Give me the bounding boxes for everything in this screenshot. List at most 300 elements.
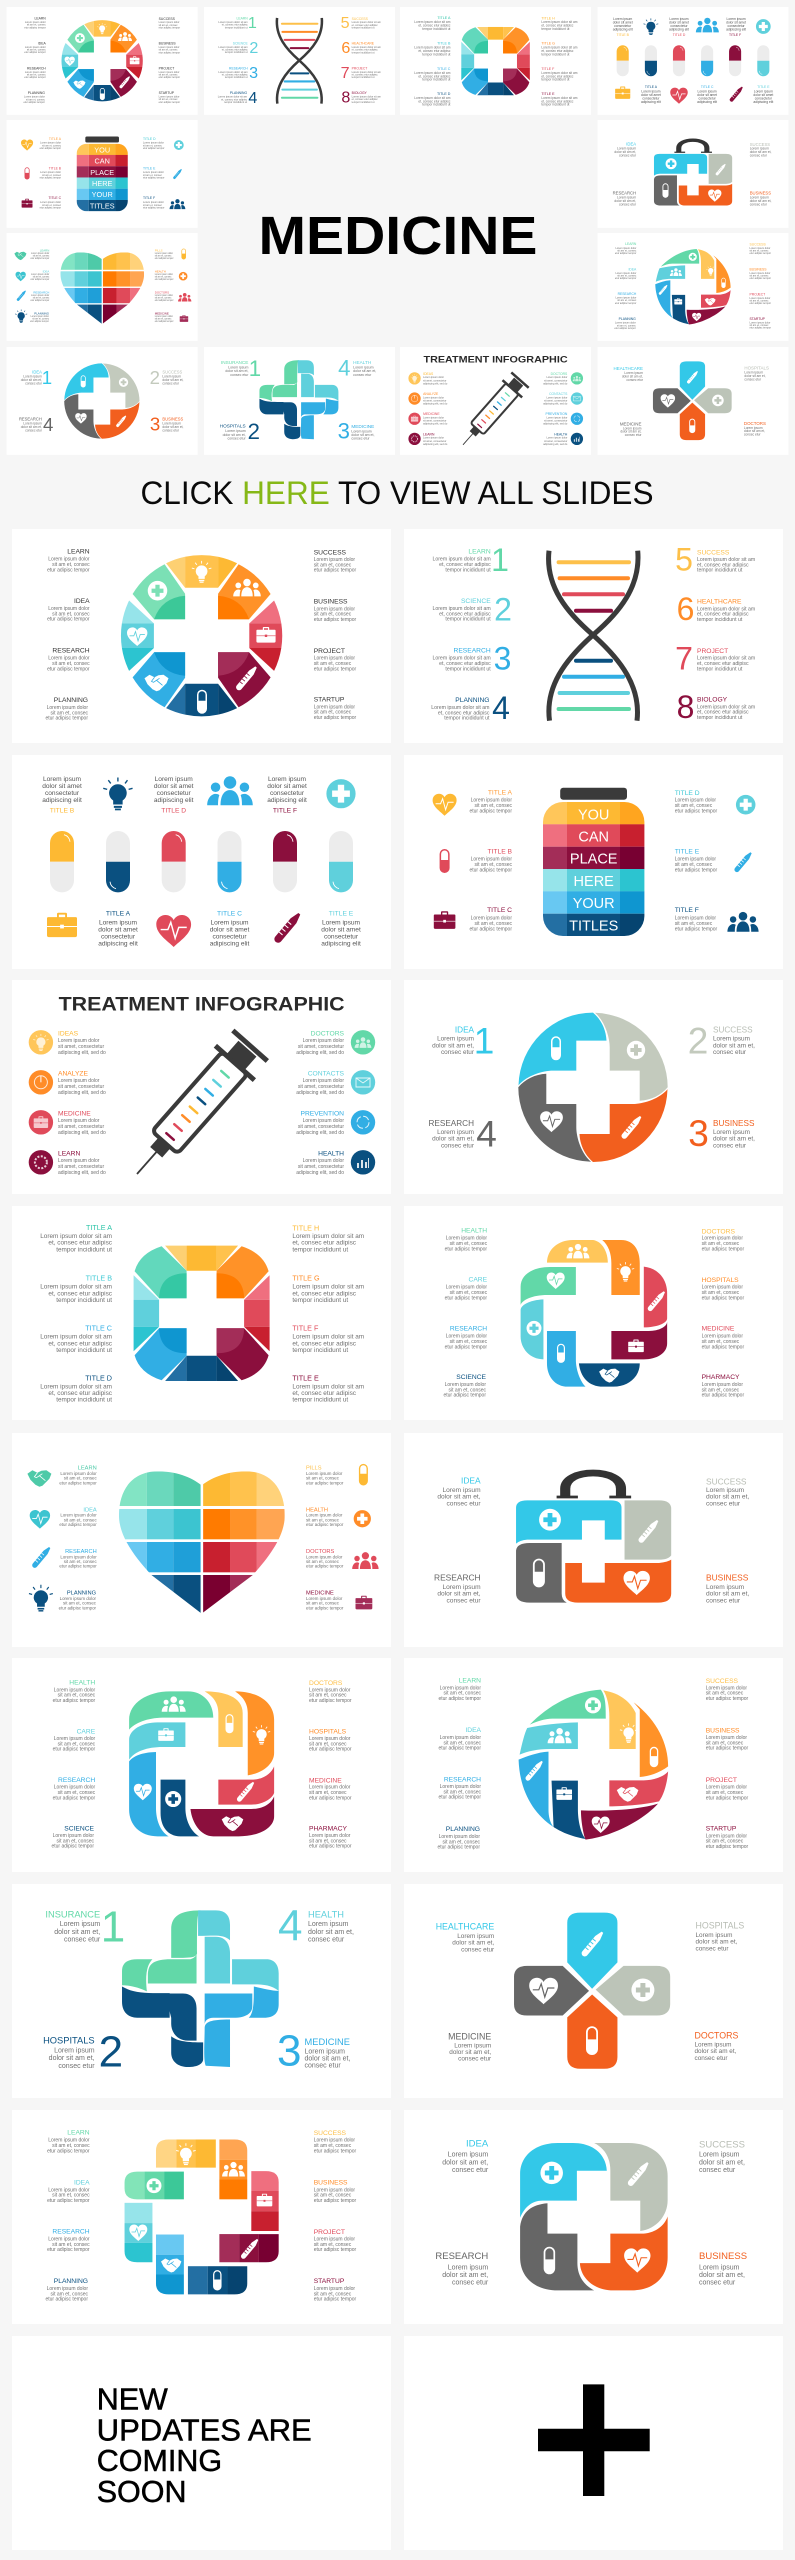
text: HOSPITALS: HOSPITALS [702, 1277, 739, 1284]
text: CONTACTS: adipiscing elit, sed do [296, 1090, 344, 1096]
text: PLANNING: PLANNING [54, 697, 88, 704]
text: LEARN [59, 1466, 97, 1485]
text: IDEA: IDEA [74, 598, 90, 605]
text: SCIENCE: Lorem ipsum dolor [445, 1382, 486, 1388]
text: TITLE D: TITLE D [161, 808, 186, 815]
text: MEDICINE: etur adipisc tempor [702, 1344, 744, 1350]
text: MEDICINE: MEDICINE [306, 1591, 334, 1597]
text: new updates are coming soon: SOON [97, 2475, 187, 2509]
text: TITLE G: TITLE G [292, 1274, 320, 1283]
text: BUSINESS: BUSINESS [706, 1727, 740, 1734]
icon: people [233, 579, 261, 596]
text: RESEARCH: sit am et, consec [52, 661, 90, 667]
text: RESEARCH [434, 1573, 481, 1604]
text: TITLE E: etur adipisc tempor [675, 867, 718, 873]
text: PHARMACY: sit am et, consec [702, 1387, 740, 1393]
text: BUSINESS: etur adipisc tempor [314, 2198, 357, 2204]
icon: heart [156, 915, 191, 947]
text: new updates are coming soon: NEW [97, 2382, 168, 2416]
text: DOCTORS: Lorem ipsum dolor [702, 1236, 743, 1242]
text: TITLE E: sit am et, consec [675, 862, 713, 868]
text: DOCTORS: sit am et, consec [306, 1559, 340, 1564]
text: BUSINESS: dolor sit am et, [713, 1136, 755, 1143]
text: TITLE B: TITLE B [86, 1274, 112, 1283]
text: IDEA [438, 1727, 482, 1752]
text: LEARN: Lorem ipsum dolor [60, 1471, 97, 1476]
icon: heart [30, 1510, 50, 1529]
text: INSURANCE: 1 [101, 1903, 125, 1952]
text: LEARN: Lorem ipsum dolor [48, 557, 90, 563]
text: TITLE F [675, 907, 718, 933]
jar words: HERE [574, 874, 614, 890]
text: TITLE A: TITLE A [106, 911, 131, 918]
text: MEDICINE [58, 1110, 106, 1136]
text: RESEARCH: etur adipisc tempor [438, 1795, 481, 1801]
text: BUSINESS: BUSINESS [713, 1119, 755, 1128]
text: SCIENCE: etur adipisc tempor [443, 1393, 486, 1399]
icon: thermometer [236, 1781, 255, 1803]
text: RESEARCH: RESEARCH [434, 1573, 481, 1583]
text: HEALTHCARE: dolor sit am et, [452, 1940, 494, 1947]
chart: circle ribbons [519, 1690, 668, 1840]
icon: plus [627, 1041, 645, 1059]
text: TITLE F: tempor incididunt ut [292, 1347, 348, 1354]
text: PROJECT: etur adipisc tempor [706, 1795, 749, 1801]
text: TITLE A: dolor sit amet [98, 926, 138, 933]
icon: plus [165, 1791, 181, 1807]
text: HEALTH: sit am et, consec [450, 1241, 488, 1247]
text: TITLE E: et, consec etur adipisc [292, 1390, 357, 1397]
text: PLANNING: PLANNING [67, 1591, 96, 1597]
text: BUSINESS: consec etur [713, 1142, 747, 1149]
text: TITLE C: Lorem ipsum dolor sit am [40, 1334, 112, 1341]
text: TITLE B: etur adipisc tempor [469, 867, 512, 873]
icon: pill [533, 1559, 545, 1587]
icon: people [352, 1552, 379, 1569]
icon: people [567, 1244, 589, 1258]
text: TITLE F: Lorem ipsum [268, 776, 306, 783]
text: TITLE D [675, 790, 718, 815]
text: PROJECT: Lorem ipsum dolor [314, 2237, 355, 2243]
panel: clover cross [404, 1884, 783, 2098]
text: TITLE B: TITLE B [50, 808, 75, 815]
text: HEALTH: HEALTH [69, 1680, 95, 1687]
text: RESEARCH: sit am et, consec [52, 2242, 90, 2248]
step 8: BIOLOGY: Lorem ipsum dolor sit am [697, 704, 755, 710]
text: TITLE E: TITLE E [675, 849, 700, 856]
text: SUCCESS: SUCCESS [706, 1678, 739, 1685]
text: RESEARCH: RESEARCH [52, 2229, 90, 2236]
jar words [569, 807, 618, 934]
text: STARTUP: sit am et, consec [314, 710, 352, 716]
text: DOCTORS: Lorem ipsum [694, 2041, 731, 2048]
text: HOSPITALS: sit am et, consec [702, 1290, 740, 1296]
text: IDEA [432, 1020, 494, 1061]
text: HEALTH [296, 1150, 344, 1176]
text: IDEA: Lorem ipsum dolor [440, 1735, 481, 1741]
text: BUSINESS: sit am et, consec [706, 1740, 744, 1746]
icon: plus [354, 1510, 371, 1527]
text: RESEARCH: RESEARCH [65, 1549, 97, 1555]
text: IDEA [59, 1507, 97, 1527]
text: TITLE D: tempor incididunt ut [56, 1397, 112, 1404]
text: STARTUP: Lorem ipsum dolor [706, 1833, 747, 1839]
panel: eight rounded ribbons [404, 1206, 783, 1420]
text: PROJECT: sit am et, consec [314, 661, 352, 667]
text: MEDICINE [309, 1777, 352, 1801]
panel: circle of eight segments [12, 529, 391, 743]
text: HOSPITALS: 2 [99, 2028, 123, 2077]
icon: briefcase [158, 1728, 174, 1741]
step 6: HEALTHCARE: Lorem ipsum dolor sit am [697, 606, 755, 612]
step 8: BIOLOGY: et, consec etur adipisc [697, 710, 749, 716]
icon: briefcase [556, 1787, 572, 1800]
text: TITLE D: TITLE D [675, 790, 700, 797]
step 7: PROJECT: PROJECT [697, 648, 728, 655]
step 1: LEARN: LEARN [468, 549, 491, 556]
text: SUCCESS [314, 549, 357, 574]
text: DOCTORS: DOCTORS [311, 1030, 345, 1037]
text: HOSPITALS: HOSPITALS [309, 1729, 347, 1736]
icon: analyze circle [29, 1070, 53, 1094]
panel: eight piece circle [404, 1658, 783, 1872]
text: TITLE A: et, consec etur adipisc [48, 1240, 113, 1247]
text: BUSINESS [314, 2179, 357, 2204]
icon: plus [527, 1321, 541, 1336]
text: SUCCESS: Lorem ipsum [699, 2152, 739, 2159]
text: CONTACTS [296, 1070, 345, 1096]
text: SCIENCE [443, 1374, 487, 1399]
icon: thermometer [235, 665, 258, 691]
text: TITLE A: tempor incididunt ut [56, 1246, 112, 1253]
thumbnail: circle slide [7, 7, 198, 115]
panel: treatment infographic [12, 980, 391, 1194]
text: HEALTH: HEALTH [318, 1150, 344, 1157]
icon: thermometer [524, 1760, 544, 1782]
thumbnail: octagon slide [400, 7, 591, 115]
text: PLANNING: sit am et, consec [50, 710, 88, 716]
text: TITLE E: consectetur [324, 933, 359, 940]
text: LEARN: sit amet, consectetur [58, 1164, 104, 1170]
text: TITLE E: Lorem ipsum dolor sit am [292, 1383, 364, 1390]
text: TITLE E: TITLE E [292, 1373, 319, 1382]
thumbnail: DNA slide [204, 7, 395, 115]
text: PHARMACY: sit am et, consec [309, 1838, 347, 1844]
text: SUCCESS: dolor sit am et, [706, 1494, 749, 1501]
chart: ribbons [521, 1240, 667, 1387]
icon: plus [585, 1697, 601, 1713]
text: HEALTH [278, 1901, 354, 1950]
text: MEDICINE: adipiscing elit, sed do [58, 1130, 106, 1136]
text: IDEA: IDEA [465, 1727, 482, 1734]
thumbnail: clover cross slide [598, 347, 789, 455]
text: DOCTORS [296, 1030, 345, 1056]
step 2: SCIENCE: SCIENCE [461, 598, 491, 605]
icon: briefcase [256, 627, 276, 643]
text: MEDICINE [306, 1591, 344, 1610]
text: LEARN [47, 2130, 90, 2154]
step 3: RESEARCH: et, consec etur adipisc [439, 661, 491, 667]
text: TITLE D: Lorem ipsum dolor sit am [40, 1383, 112, 1390]
text: PREVENTION: Lorem ipsum dolor [303, 1118, 344, 1124]
panel: medical bag [404, 1433, 783, 1647]
text: TITLE D: etur adipisc tempor [675, 809, 718, 815]
text: RESEARCH: RESEARCH [428, 1119, 474, 1128]
icon: thermometer [647, 1290, 666, 1312]
text: HEALTH: Lorem ipsum dolor [306, 1513, 342, 1518]
text: CARE [445, 1277, 488, 1301]
text: SUCCESS [706, 1678, 749, 1702]
panel: medicine jar [404, 755, 783, 969]
icon: plus [147, 2178, 161, 2193]
text: CONTACTS: sit amet, consectetur [298, 1084, 344, 1090]
text: RESEARCH: sit am et, consec [443, 1789, 481, 1795]
text: TITLE A: adipiscing elit [98, 940, 138, 947]
text: PILLS: etur adipisc tempor [306, 1480, 344, 1485]
text: SUCCESS: etur adipisc tempor [314, 2148, 357, 2154]
text: TITLE A: sit am et, consec [474, 803, 512, 809]
text: TITLE B: dolor sit amet [42, 783, 82, 790]
step 2: SCIENCE: 2 [494, 591, 512, 627]
text: BUSINESS [706, 1727, 749, 1752]
text: HOSPITALS: sit am et, consec [309, 1741, 347, 1747]
text: SCIENCE: SCIENCE [64, 1825, 95, 1832]
heading: click here to view all slides: CLICK HERE TO VIEW ALL SLIDES [140, 475, 654, 511]
panel: blocks [12, 2110, 391, 2324]
text: TITLE C: Lorem ipsum [210, 919, 249, 926]
text: TITLE D: adipiscing elit [154, 797, 194, 804]
text: HEALTHCARE: HEALTHCARE [436, 1921, 494, 1931]
text: RESEARCH: Lorem ipsum [448, 2264, 488, 2271]
text: STARTUP: STARTUP [314, 2278, 345, 2285]
text: MEDICINE: MEDICINE [58, 1110, 91, 1117]
text: MEDICINE [448, 2031, 492, 2063]
text: RESEARCH: Lorem ipsum [442, 1584, 481, 1591]
text: TITLE E: adipiscing elit [321, 940, 361, 947]
text: TITLE A [98, 911, 138, 947]
icon: handshake [617, 1787, 638, 1802]
step 5: SUCCESS [675, 542, 755, 578]
icon: plus [539, 1509, 561, 1531]
text: SUCCESS: Lorem ipsum [706, 1487, 744, 1494]
text: STARTUP: Lorem ipsum dolor [314, 704, 355, 710]
step 1: LEARN [432, 542, 509, 578]
icon: bulb [176, 2143, 196, 2165]
text: SUCCESS [699, 2139, 745, 2174]
step 7: PROJECT [675, 641, 755, 677]
text: LEARN: Lorem ipsum dolor [440, 1685, 481, 1691]
text: IDEA [442, 2138, 489, 2174]
text: SUCCESS [706, 1476, 749, 1507]
text: RESEARCH: RESEARCH [435, 2251, 488, 2262]
text: SUCCESS: dolor sit am et, [699, 2159, 745, 2166]
text: IDEA: sit am et, consec [52, 611, 90, 617]
chart: four petals [514, 1913, 670, 2069]
text: BUSINESS: Lorem ipsum dolor [314, 2187, 355, 2193]
text: TITLE C [210, 911, 249, 947]
text: LEARN: sit am et, consec [443, 1691, 481, 1697]
text: DOCTORS: sit am et, consec [702, 1241, 740, 1247]
text: CARE: etur adipisc tempor [445, 1295, 487, 1301]
text: ANALYZE: sit amet, consectetur [58, 1084, 104, 1090]
text: RESEARCH: RESEARCH [58, 1777, 95, 1784]
text: PROJECT: PROJECT [314, 2229, 345, 2236]
step 5: SUCCESS: et, consec etur adipisc [697, 562, 749, 568]
icon: thermometer [637, 1519, 660, 1544]
step 4: PLANNING: Lorem ipsum dolor sit am [431, 705, 490, 711]
text: RESEARCH: Lorem ipsum dolor [446, 1334, 487, 1340]
text: PROJECT [706, 1777, 749, 1801]
icon: heart [529, 1978, 558, 2004]
step 7: PROJECT: 7 [675, 641, 693, 677]
text: IDEA: etur adipisc tempor [47, 2198, 90, 2204]
text: DOCTORS: dolor sit am et, [694, 2048, 737, 2055]
text: SUCCESS: Lorem ipsum [713, 1036, 750, 1043]
step 6: HEALTHCARE [677, 591, 755, 627]
icon: doctors circle [351, 1030, 375, 1054]
text: CARE: CARE [469, 1277, 488, 1284]
icon: briefcase [434, 911, 455, 929]
text: RESEARCH: RESEARCH [52, 648, 90, 655]
text: TITLE B: Lorem ipsum [43, 776, 81, 783]
text: RESEARCH [435, 2251, 489, 2286]
text: STARTUP: sit am et, consec [706, 1839, 744, 1845]
text: HOSPITALS: etur adipisc tempor [702, 1295, 744, 1301]
step 8: BIOLOGY [677, 689, 755, 725]
text: TITLE A [469, 789, 513, 815]
icon: pill [544, 2247, 555, 2274]
capsule row [50, 831, 353, 892]
text: CARE: Lorem ipsum dolor [54, 1736, 95, 1742]
text: HOSPITALS: HOSPITALS [696, 1920, 744, 1930]
text: MEDICINE [277, 2027, 350, 2076]
text: TITLE G: Lorem ipsum dolor sit am [292, 1284, 364, 1291]
text: TITLE D: TITLE D [85, 1373, 112, 1382]
text: SUCCESS: Lorem ipsum dolor [706, 1685, 747, 1691]
text: STARTUP: Lorem ipsum dolor [314, 2286, 355, 2292]
text: IDEA: IDEA [74, 2179, 90, 2186]
text: BUSINESS: BUSINESS [314, 599, 348, 606]
text: BUSINESS: BUSINESS [314, 2179, 348, 2186]
text: BUSINESS: dolor sit am et, [706, 1591, 749, 1598]
text: MEDICINE: Lorem ipsum [454, 2042, 491, 2049]
text: PROJECT: PROJECT [314, 648, 345, 655]
icon: bulb [103, 778, 133, 810]
text: LEARN: LEARN [67, 549, 90, 556]
text: PROJECT: sit am et, consec [314, 2242, 352, 2248]
text: MEDICINE: sit am et, consec [702, 1339, 740, 1345]
text: HEALTH: 4 [278, 1901, 303, 1950]
text: HEALTH: sit am et, consec [58, 1693, 96, 1699]
text: IDEA: dolor sit am et, [437, 1494, 481, 1501]
text: RESEARCH: sit am et, consec [58, 1790, 96, 1796]
thumbnail: knot cross slide [204, 347, 395, 455]
panel: knot cross [12, 1884, 391, 2098]
step 1: LEARN: et, consec etur adipisc [439, 562, 491, 568]
text: MEDICINE: Lorem ipsum dolor [702, 1334, 743, 1340]
text: HOSPITALS: Lorem ipsum dolor [702, 1285, 743, 1291]
text: MEDICINE: Lorem ipsum dolor [306, 1596, 342, 1601]
text: TITLE F: TITLE F [675, 907, 699, 914]
icon: thermometer [627, 2161, 650, 2187]
text: ANALYZE: Lorem ipsum dolor [58, 1078, 99, 1084]
step 5: SUCCESS: SUCCESS [697, 549, 730, 556]
text: HEALTH [306, 1507, 344, 1527]
step 4: PLANNING: tempor incididunt ut [444, 716, 490, 722]
text: DOCTORS: etur adipisc tempor [309, 1698, 352, 1704]
text: RESEARCH [47, 648, 90, 672]
text: SUCCESS: Lorem ipsum dolor [314, 557, 355, 563]
text: TITLE A: consectetur [101, 933, 136, 940]
step 6: HEALTHCARE: tempor incididunt ut [697, 617, 743, 623]
text: TITLE B: Lorem ipsum dolor [471, 856, 512, 862]
text: RESEARCH: etur adipisc tempor [53, 1795, 96, 1801]
text: BUSINESS: sit am et, consec [314, 2193, 352, 2199]
text: PILLS: Lorem ipsum dolor [306, 1471, 342, 1476]
text: DOCTORS: Lorem ipsum dolor [306, 1554, 342, 1559]
text: IDEA: consec etur [447, 1500, 481, 1507]
text: MEDICINE: Lorem ipsum [304, 2048, 345, 2055]
thumbnail: four part circle slide [7, 347, 198, 455]
text: ANALYZE: adipiscing elit, sed do [58, 1090, 106, 1096]
text: TITLE H: TITLE H [292, 1224, 319, 1233]
icon: people [162, 1696, 186, 1712]
icon: contacts circle [351, 1070, 375, 1094]
icon: people [207, 776, 253, 805]
text: STARTUP: STARTUP [314, 697, 345, 704]
thumbnail: jar slide [7, 120, 198, 228]
text: PLANNING: sit am et, consec [442, 1839, 480, 1845]
text: LEARN: sit am et, consec [52, 562, 90, 568]
text: IDEA: etur adipisc tempor [59, 1522, 97, 1527]
text: CONTACTS: CONTACTS [308, 1070, 345, 1077]
text: LEARN: etur adipisc tempor [438, 1696, 481, 1702]
text: TITLE B: tempor incididunt ut [56, 1297, 112, 1304]
text: DOCTORS: etur adipisc tempor [702, 1246, 744, 1252]
text: IDEA [437, 1476, 481, 1507]
text: SUCCESS: sit am et, consec [314, 2143, 352, 2149]
text: TITLE C: adipiscing elit [210, 940, 249, 947]
text: TITLE B [42, 776, 82, 815]
text: HEALTH: HEALTH [308, 1909, 344, 1919]
text: TITLE B: Lorem ipsum dolor sit am [40, 1284, 112, 1291]
icon: pill [213, 2270, 222, 2290]
text: IDEA: dolor sit am et, [432, 1042, 474, 1049]
text: SUCCESS [314, 2130, 357, 2154]
text: INSURANCE: dolor sit am et, [54, 1929, 100, 1936]
text: HOSPITALS [309, 1729, 352, 1753]
text: RESEARCH: Lorem ipsum dolor [440, 1784, 481, 1790]
text: STARTUP: sit am et, consec [314, 2291, 352, 2297]
text: TITLE F [292, 1324, 364, 1354]
text: TITLE A: Lorem ipsum [99, 919, 137, 926]
thumbnail: cross in circle slide [598, 233, 789, 341]
text: LEARN [58, 1150, 106, 1176]
text: DOCTORS [702, 1228, 744, 1252]
text: LEARN [438, 1677, 481, 1702]
text: HEALTH: sit am et, consec [306, 1517, 340, 1522]
text: RESEARCH: consec etur [447, 1597, 481, 1604]
thumbnail: heart slide [7, 233, 198, 341]
icon: medicine circle [29, 1110, 53, 1134]
text: IDEA: sit am et, consec [443, 1740, 481, 1746]
step 7: PROJECT: Lorem ipsum dolor sit am [697, 656, 755, 662]
text: TITLE F: consectetur [270, 790, 305, 797]
text: MEDICINE: 3 [277, 2027, 302, 2076]
text: PLANNING: PLANNING [54, 2278, 88, 2285]
text: IDEA: sit am et, consec [52, 2193, 90, 2199]
text: PHARMACY: etur adipisc tempor [309, 1844, 352, 1850]
